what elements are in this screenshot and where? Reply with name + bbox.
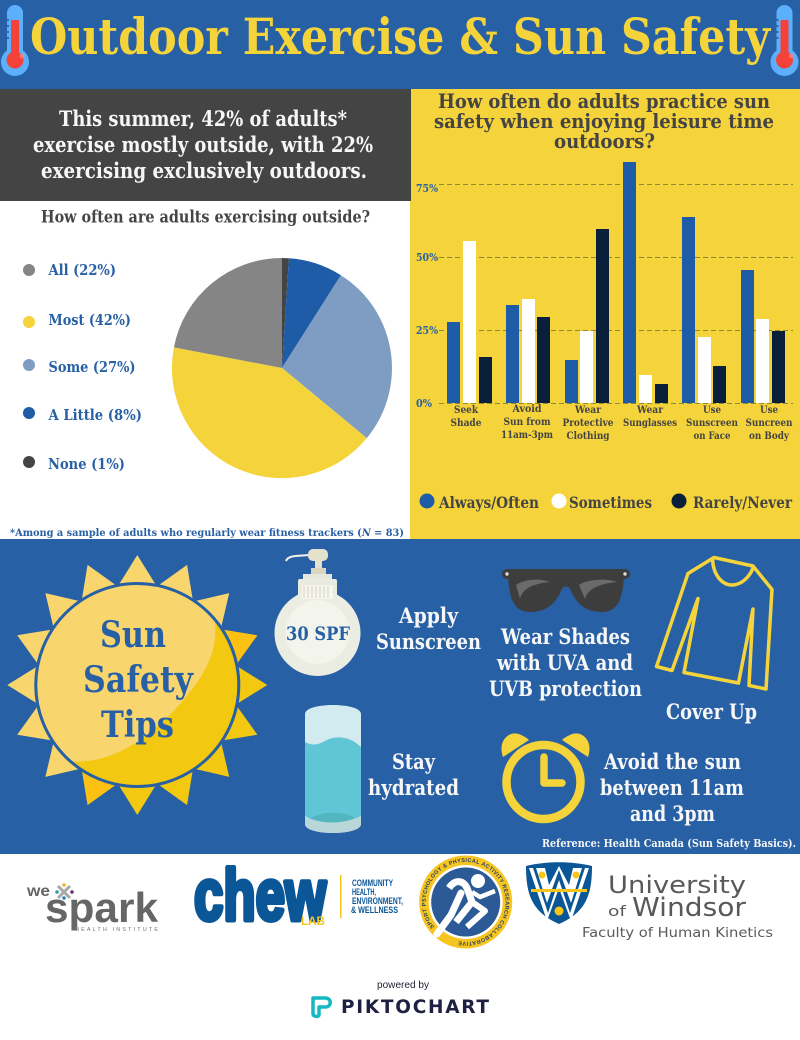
x-axis labels: Sun from: [504, 416, 550, 428]
powered by Piktochart: [313, 979, 489, 1018]
x-axis labels: on Body: [749, 430, 790, 442]
pie legend: [23, 262, 142, 473]
pie legend: All (22%): [48, 262, 116, 279]
panel: summer statistic: exercising exclusively outdoors.: [41, 158, 367, 183]
icon: sunglasses: [502, 569, 630, 612]
icon: long-sleeve shirt: [656, 558, 772, 689]
icon: sunscreen bottle: 30 SPF: [286, 623, 350, 645]
logo: We Spark Health Institute: HEALTH INSTITUTE: [75, 927, 158, 933]
y-axis labels: 25%: [416, 324, 438, 337]
text: apply sunscreen: Apply: [398, 603, 459, 628]
heading: bar chart: outdoors?: [554, 129, 655, 153]
text: stay hydrated: hydrated: [368, 775, 459, 800]
x-axis labels: Use: [703, 404, 721, 416]
x-axis labels: Use: [760, 404, 778, 416]
heading: bar chart: safety when enjoying leisure time: [434, 109, 774, 133]
logo: University of Windsor wordmark: [582, 871, 773, 941]
bar chart legend: [420, 493, 792, 512]
icon: sun with heading: Sun: [100, 614, 166, 656]
logo: CHEW Lab: chew: [194, 856, 327, 936]
logo: CHEW Lab: & WELLNESS: [351, 905, 398, 916]
heading: pie chart: How often are adults exercising outside?: [41, 208, 370, 226]
x-axis labels: [450, 403, 793, 442]
text: stay hydrated: [368, 749, 459, 800]
x-axis labels: Shade: [450, 417, 482, 429]
logo: University of Windsor shield: [526, 862, 592, 924]
bar chart legend: Always/Often: [438, 493, 539, 512]
icon: sunscreen bottle: [274, 549, 360, 676]
icon: sun with heading: [7, 555, 267, 815]
x-axis labels: Seek: [454, 404, 479, 416]
pie legend: Some (27%): [48, 359, 136, 376]
panel: sun safety bar chart: [410, 89, 800, 540]
bar chart legend: Sometimes: [569, 493, 652, 512]
icon: sun with heading: Tips: [101, 704, 174, 746]
powered by Piktochart: PIKTOCHART: [341, 997, 489, 1018]
logo: University of Windsor wordmark: of: [608, 904, 627, 920]
icon: sun with heading: Safety: [83, 659, 194, 701]
panel: summer statistic: [0, 89, 411, 201]
text: cover up: Cover Up: [666, 699, 757, 724]
x-axis labels: on Face: [694, 430, 731, 442]
text: avoid the sun: between 11am: [600, 775, 744, 800]
text: apply sunscreen: [376, 603, 481, 654]
logo: We Spark Health Institute: we: [26, 883, 50, 900]
y-axis labels: 0%: [416, 397, 432, 410]
text: avoid the sun: [600, 749, 744, 826]
logo: University of Windsor wordmark: Faculty of Human Kinetics: [582, 925, 773, 941]
x-axis labels: Clothing: [566, 430, 610, 442]
x-axis labels: Avoid: [512, 403, 542, 415]
icon: alarm clock: [501, 733, 590, 819]
header banner: [0, 0, 800, 89]
footnote: *Among a sample of adults who regularly wear fitness trackers (N = 83): [10, 527, 404, 539]
logo: CHEW Lab: LAB: [301, 914, 325, 928]
text: wear shades: [489, 624, 642, 701]
x-axis labels: Wear: [636, 404, 663, 416]
bar chart: [447, 162, 785, 403]
pie chart: [172, 258, 392, 478]
logo: CHEW Lab: COMMUNITY: [352, 878, 393, 889]
pie legend: A Little (8%): [48, 407, 142, 424]
logo: CHEW Lab: ENVIRONMENT,: [352, 896, 403, 907]
x-axis labels: 11am-3pm: [501, 429, 553, 441]
icon: left thermometer: [1, 5, 29, 76]
logo: University of Windsor wordmark: Windsor: [632, 893, 746, 923]
x-axis labels: Suncreen: [746, 417, 793, 429]
text: wear shades: Wear Shades: [500, 624, 630, 649]
x-axis labels: Wear: [574, 404, 601, 416]
x-axis labels: Sunglasses: [623, 417, 677, 429]
icon: right thermometer: [770, 5, 798, 76]
panel: summer statistic: This summer, 42% of adults*: [59, 106, 347, 131]
x-axis labels: Protective: [562, 417, 614, 429]
heading: bar chart: [434, 89, 774, 153]
powered by Piktochart: powered by: [377, 979, 430, 991]
text: stay hydrated: Stay: [392, 749, 436, 774]
logo: CHEW Lab: HEALTH,: [352, 887, 376, 898]
logo: sport psychology collaborative badge: SPORT PSYCHOLOGY & PHYSICAL ACTIVITY RESEARCH COLLABORATIVE: [422, 858, 510, 946]
y-axis labels: [416, 182, 438, 410]
pie legend: Most (42%): [48, 312, 131, 329]
pie legend: None (1%): [48, 456, 125, 473]
y-axis labels: 50%: [416, 251, 438, 264]
text: apply sunscreen: Sunscreen: [376, 629, 481, 654]
text: avoid the sun: Avoid the sun: [603, 749, 741, 774]
panel: sun safety tips: [0, 539, 800, 854]
text: avoid the sun: and 3pm: [630, 801, 715, 826]
logo: We Spark Health Institute: spark: [45, 884, 159, 931]
icon: glass of water: [305, 705, 361, 833]
x-axis labels: Sunscreen: [686, 417, 738, 429]
logo: University of Windsor wordmark: University: [608, 871, 746, 899]
y-axis labels: 75%: [416, 182, 438, 195]
heading: bar chart: How often do adults practice sun: [438, 89, 770, 113]
panel: summer statistic: exercise mostly outside, with 22%: [33, 132, 373, 157]
text: wear shades: with UVA and: [496, 650, 633, 675]
text: wear shades: UVB protection: [489, 676, 642, 701]
